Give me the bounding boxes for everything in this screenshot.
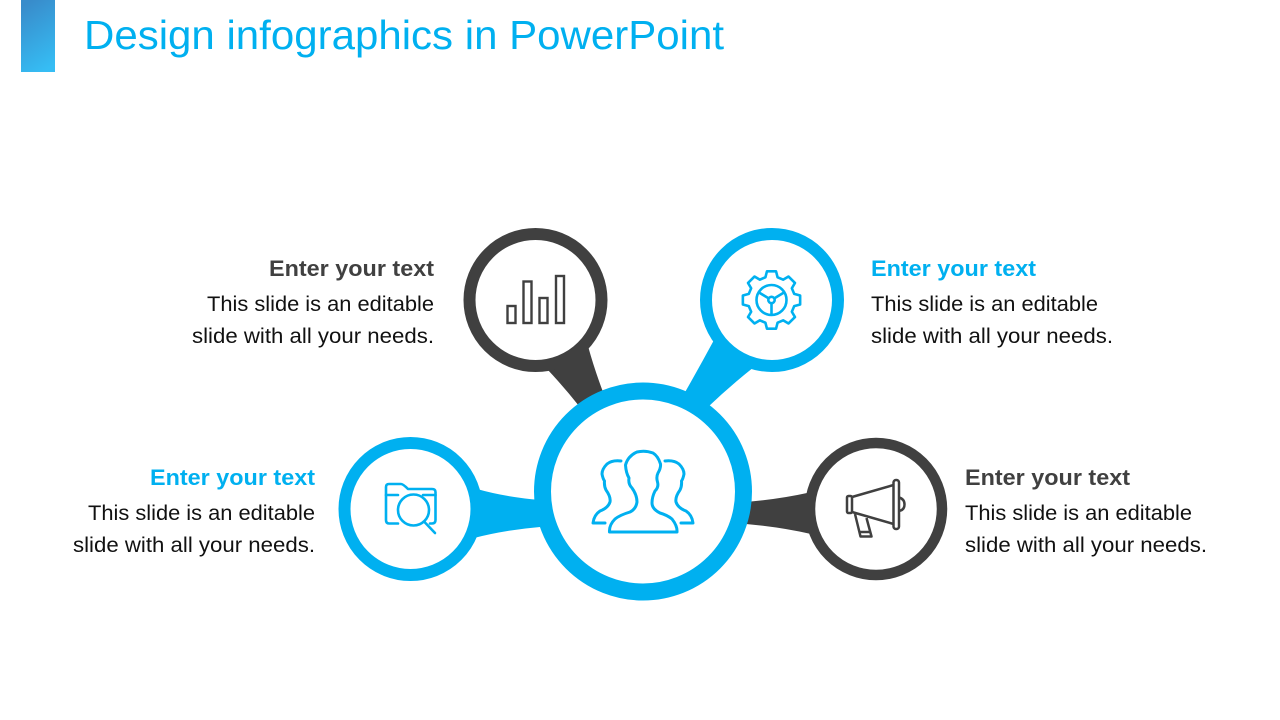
icon: megaphone xyxy=(847,480,904,536)
text block: top right: This slide is an editable xyxy=(871,292,1098,316)
text block: top left: This slide is an editable xyxy=(207,292,434,316)
text block: bottom left xyxy=(73,465,316,557)
central hub circle xyxy=(542,391,744,592)
connector: top right xyxy=(684,340,754,407)
text block: top right xyxy=(871,256,1113,348)
connector: left xyxy=(474,489,540,538)
icon: people xyxy=(593,451,693,532)
title: Design infographics in PowerPoint xyxy=(84,12,725,58)
text block: top left xyxy=(192,256,435,348)
text block: top left: Enter your text xyxy=(269,256,435,281)
text block: bottom right: This slide is an editable xyxy=(965,501,1192,525)
icon: gear with wheel xyxy=(743,271,800,329)
text block: bottom left: slide with all your needs. xyxy=(73,533,315,557)
connector: right xyxy=(746,493,811,534)
title accent bar xyxy=(21,0,55,72)
icon: folder with magnifier xyxy=(386,484,436,533)
node: folder search circle xyxy=(344,443,476,575)
node: gear circle xyxy=(706,234,838,366)
text block: bottom right: Enter your text xyxy=(965,465,1131,490)
text block: top right: slide with all your needs. xyxy=(871,324,1113,348)
text block: top right: Enter your text xyxy=(871,256,1037,281)
node: bar chart circle xyxy=(470,234,602,366)
node: megaphone circle xyxy=(810,443,942,575)
text block: bottom left: This slide is an editable xyxy=(88,501,315,525)
connector: top left xyxy=(547,346,603,406)
text block: top left: slide with all your needs. xyxy=(192,324,434,348)
text block: bottom left: Enter your text xyxy=(150,465,316,490)
text block: bottom right xyxy=(965,465,1207,557)
text block: bottom right: slide with all your needs. xyxy=(965,533,1207,557)
icon: bar chart xyxy=(508,276,564,323)
